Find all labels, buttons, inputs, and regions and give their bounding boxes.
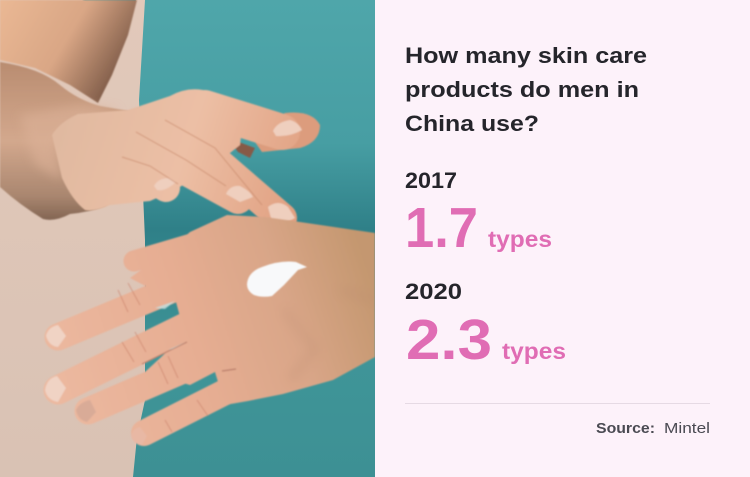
palm <box>130 215 375 405</box>
back finger <box>250 112 320 152</box>
cream dollop <box>247 262 307 297</box>
finger 3 <box>88 352 225 411</box>
index finger <box>180 130 282 218</box>
source: Source: <box>596 420 655 437</box>
little finger <box>120 160 166 188</box>
finger creases <box>122 120 262 205</box>
gaps between fingers <box>142 342 236 371</box>
stat: 2020: types <box>502 338 566 364</box>
teal t-shirt <box>133 0 375 477</box>
heading: products do men in <box>405 77 639 102</box>
palm <box>52 89 245 210</box>
stat: 2020: 2020 <box>405 279 462 304</box>
nails <box>273 120 302 136</box>
knuckles and veins <box>118 283 208 432</box>
forearm and wrist <box>0 62 135 220</box>
thumb <box>134 243 195 261</box>
heading: China use? <box>405 111 539 136</box>
stat: 2017 <box>405 168 552 260</box>
stat: 2020 <box>405 279 566 372</box>
upper arm <box>0 0 137 103</box>
heading: How many skin care <box>405 43 647 68</box>
middle finger <box>130 140 238 199</box>
heading <box>405 43 647 136</box>
lower hand <box>45 215 375 445</box>
finger 2 <box>58 320 200 390</box>
top finger <box>205 108 282 132</box>
photo: man applying cream to his hand <box>0 0 375 477</box>
stat: 2020: 2.3 <box>406 308 492 372</box>
finger 4 <box>144 382 245 433</box>
panel: statistics <box>375 0 750 477</box>
source: Mintel <box>664 420 710 437</box>
stat: 2017: types <box>488 226 552 252</box>
finger 1 <box>58 282 190 337</box>
source <box>596 420 710 437</box>
upper hand <box>52 89 320 223</box>
stat: 2017: 2017 <box>405 168 457 193</box>
nails <box>46 325 66 347</box>
sleeve <box>82 0 136 5</box>
stat: 2017: 1.7 <box>405 196 478 260</box>
